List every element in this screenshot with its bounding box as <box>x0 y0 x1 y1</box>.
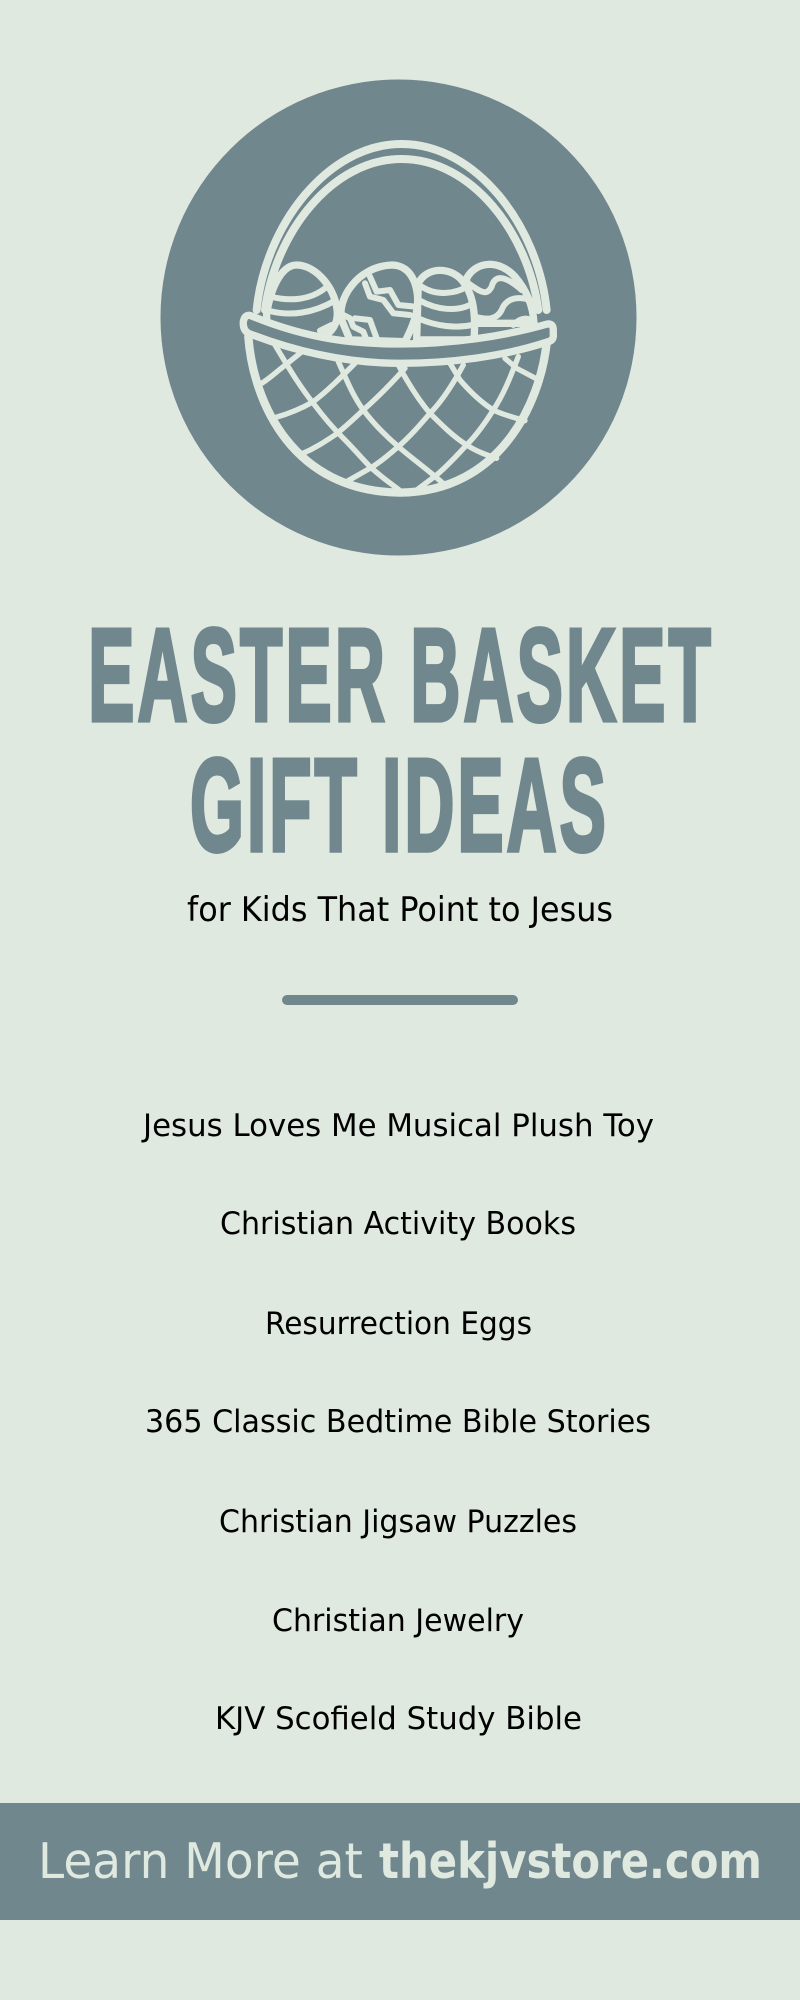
title: EASTER BASKET <box>88 603 711 749</box>
footer banner <box>0 1803 800 1920</box>
subtitle: for Kids That Point to Jesus <box>187 890 613 930</box>
title <box>88 603 711 879</box>
divider <box>282 995 518 1005</box>
item 7: KJV Scofield Study Bible <box>215 1701 582 1737</box>
item 5: Christian Jigsaw Puzzles <box>219 1504 577 1540</box>
icon: easter basket in circle <box>160 80 636 556</box>
item 4: 365 Classic Bedtime Bible Stories <box>145 1404 651 1440</box>
footer text: learn more: Learn More at <box>38 1833 363 1890</box>
gift ideas list <box>141 1108 654 1737</box>
item 1: Jesus Loves Me Musical Plush Toy <box>141 1108 654 1144</box>
item 6: Christian Jewelry <box>272 1603 524 1639</box>
title: GIFT IDEAS <box>190 733 606 879</box>
item 3: Resurrection Eggs <box>265 1306 532 1342</box>
basket handle <box>257 144 547 310</box>
item 2: Christian Activity Books <box>220 1206 576 1242</box>
basket lattice <box>261 345 540 491</box>
basket rim <box>243 315 553 363</box>
easter eggs <box>267 264 534 342</box>
basket body <box>248 337 547 493</box>
